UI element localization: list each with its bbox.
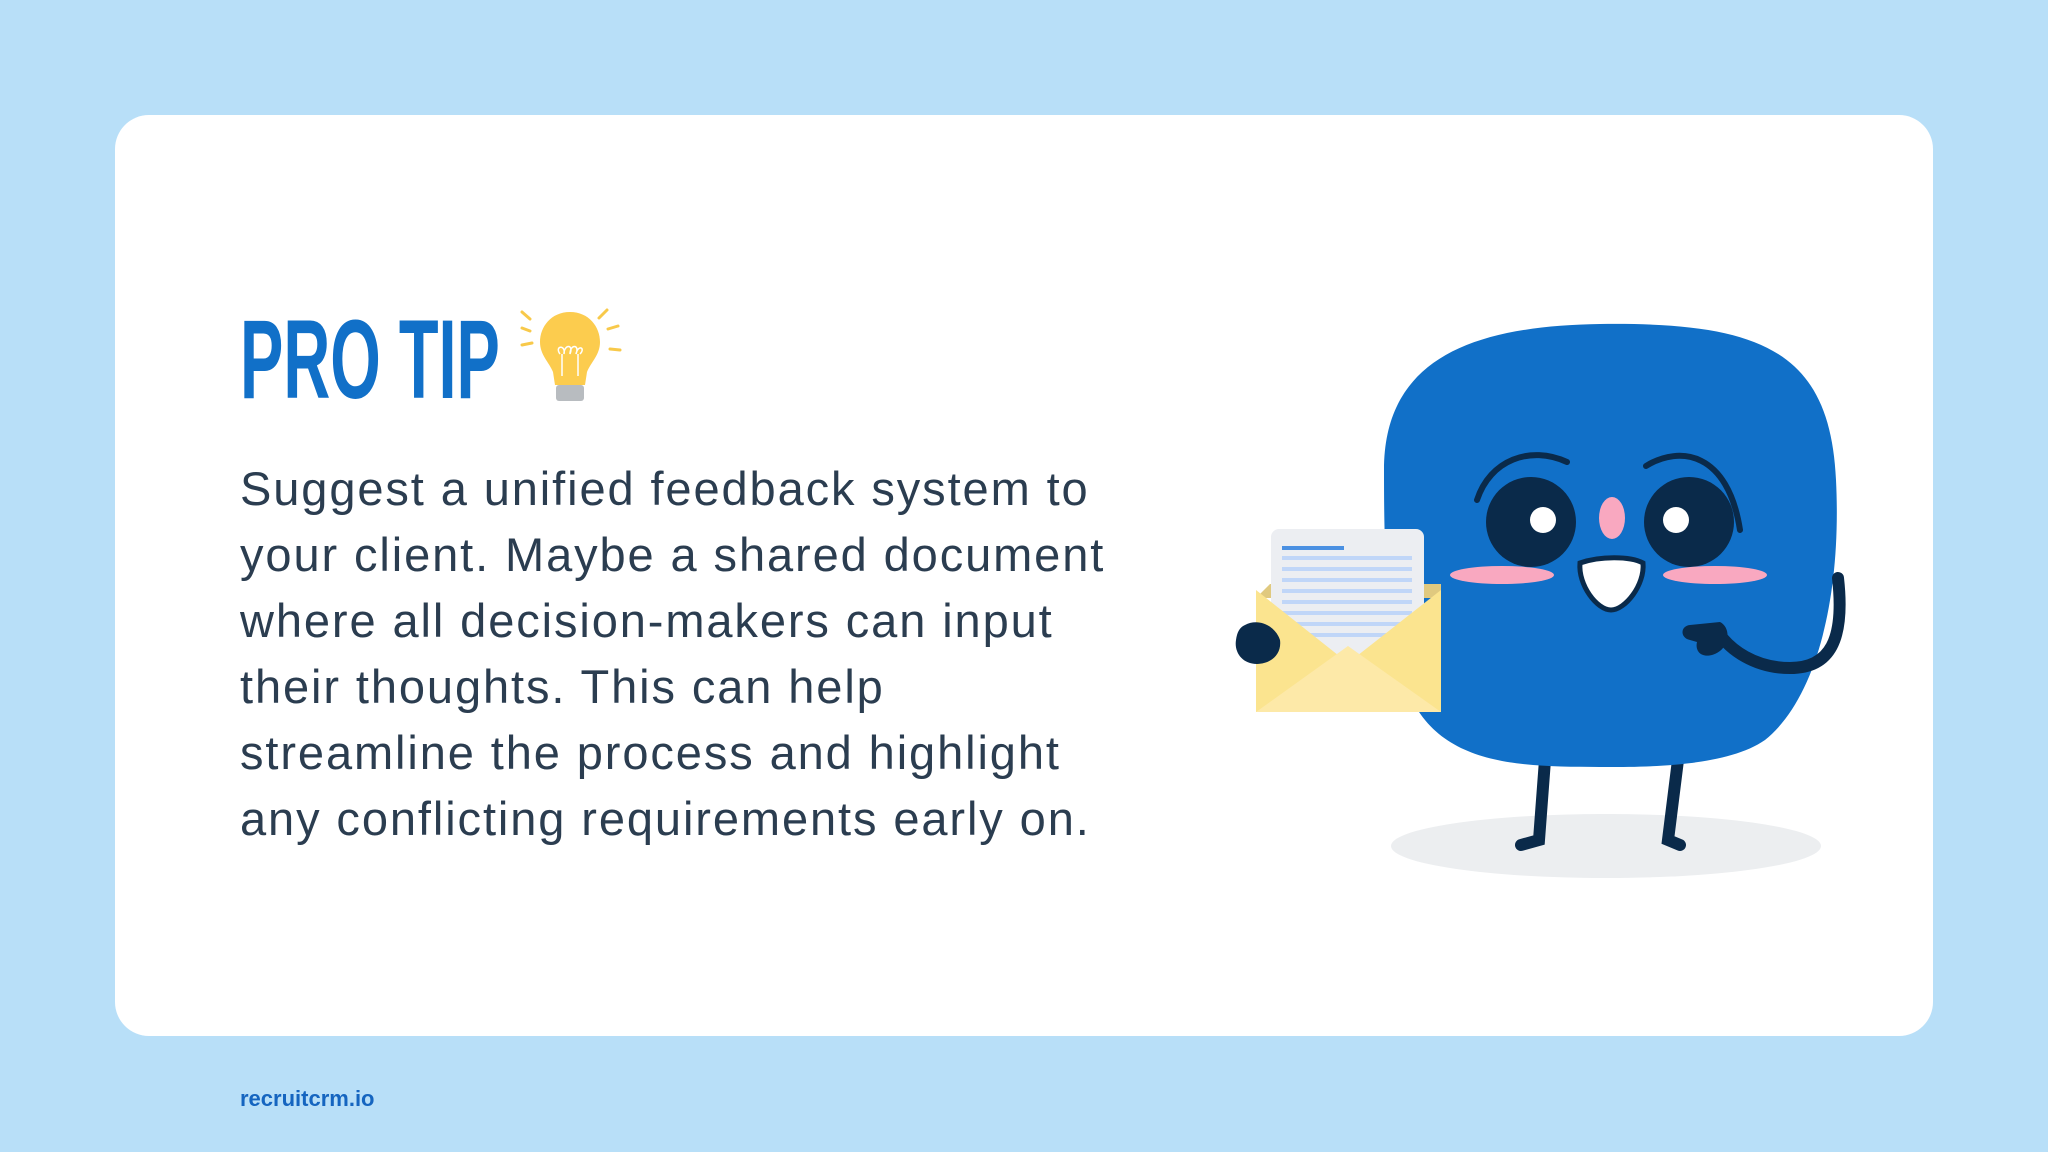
eyes — [1486, 477, 1576, 567]
envelope with letter — [1256, 529, 1441, 712]
eyebrows — [1477, 455, 1740, 530]
mascot — [1236, 324, 1840, 878]
icon: light bulb — [522, 310, 620, 401]
cheeks — [1450, 566, 1554, 584]
mouth — [1580, 558, 1643, 610]
body text: where all decision-makers can input — [240, 594, 1054, 647]
body — [1384, 324, 1837, 767]
body text — [240, 462, 1105, 845]
shadow — [1391, 814, 1821, 878]
legs — [1521, 760, 1680, 845]
body text: any conflicting requirements early on. — [240, 792, 1091, 845]
body text: Suggest a unified feedback system to — [240, 462, 1090, 515]
footer url: recruitcrm.io — [240, 1086, 374, 1111]
body text: your client. Maybe a shared document — [240, 528, 1105, 581]
body text: their thoughts. This can help — [240, 660, 885, 713]
nose — [1599, 497, 1625, 539]
left hand — [1236, 622, 1280, 664]
title: PRO TIP — [240, 297, 500, 422]
right arm pointing — [1682, 578, 1840, 668]
card panel — [115, 115, 1933, 1036]
body text: streamline the process and highlight — [240, 726, 1061, 779]
